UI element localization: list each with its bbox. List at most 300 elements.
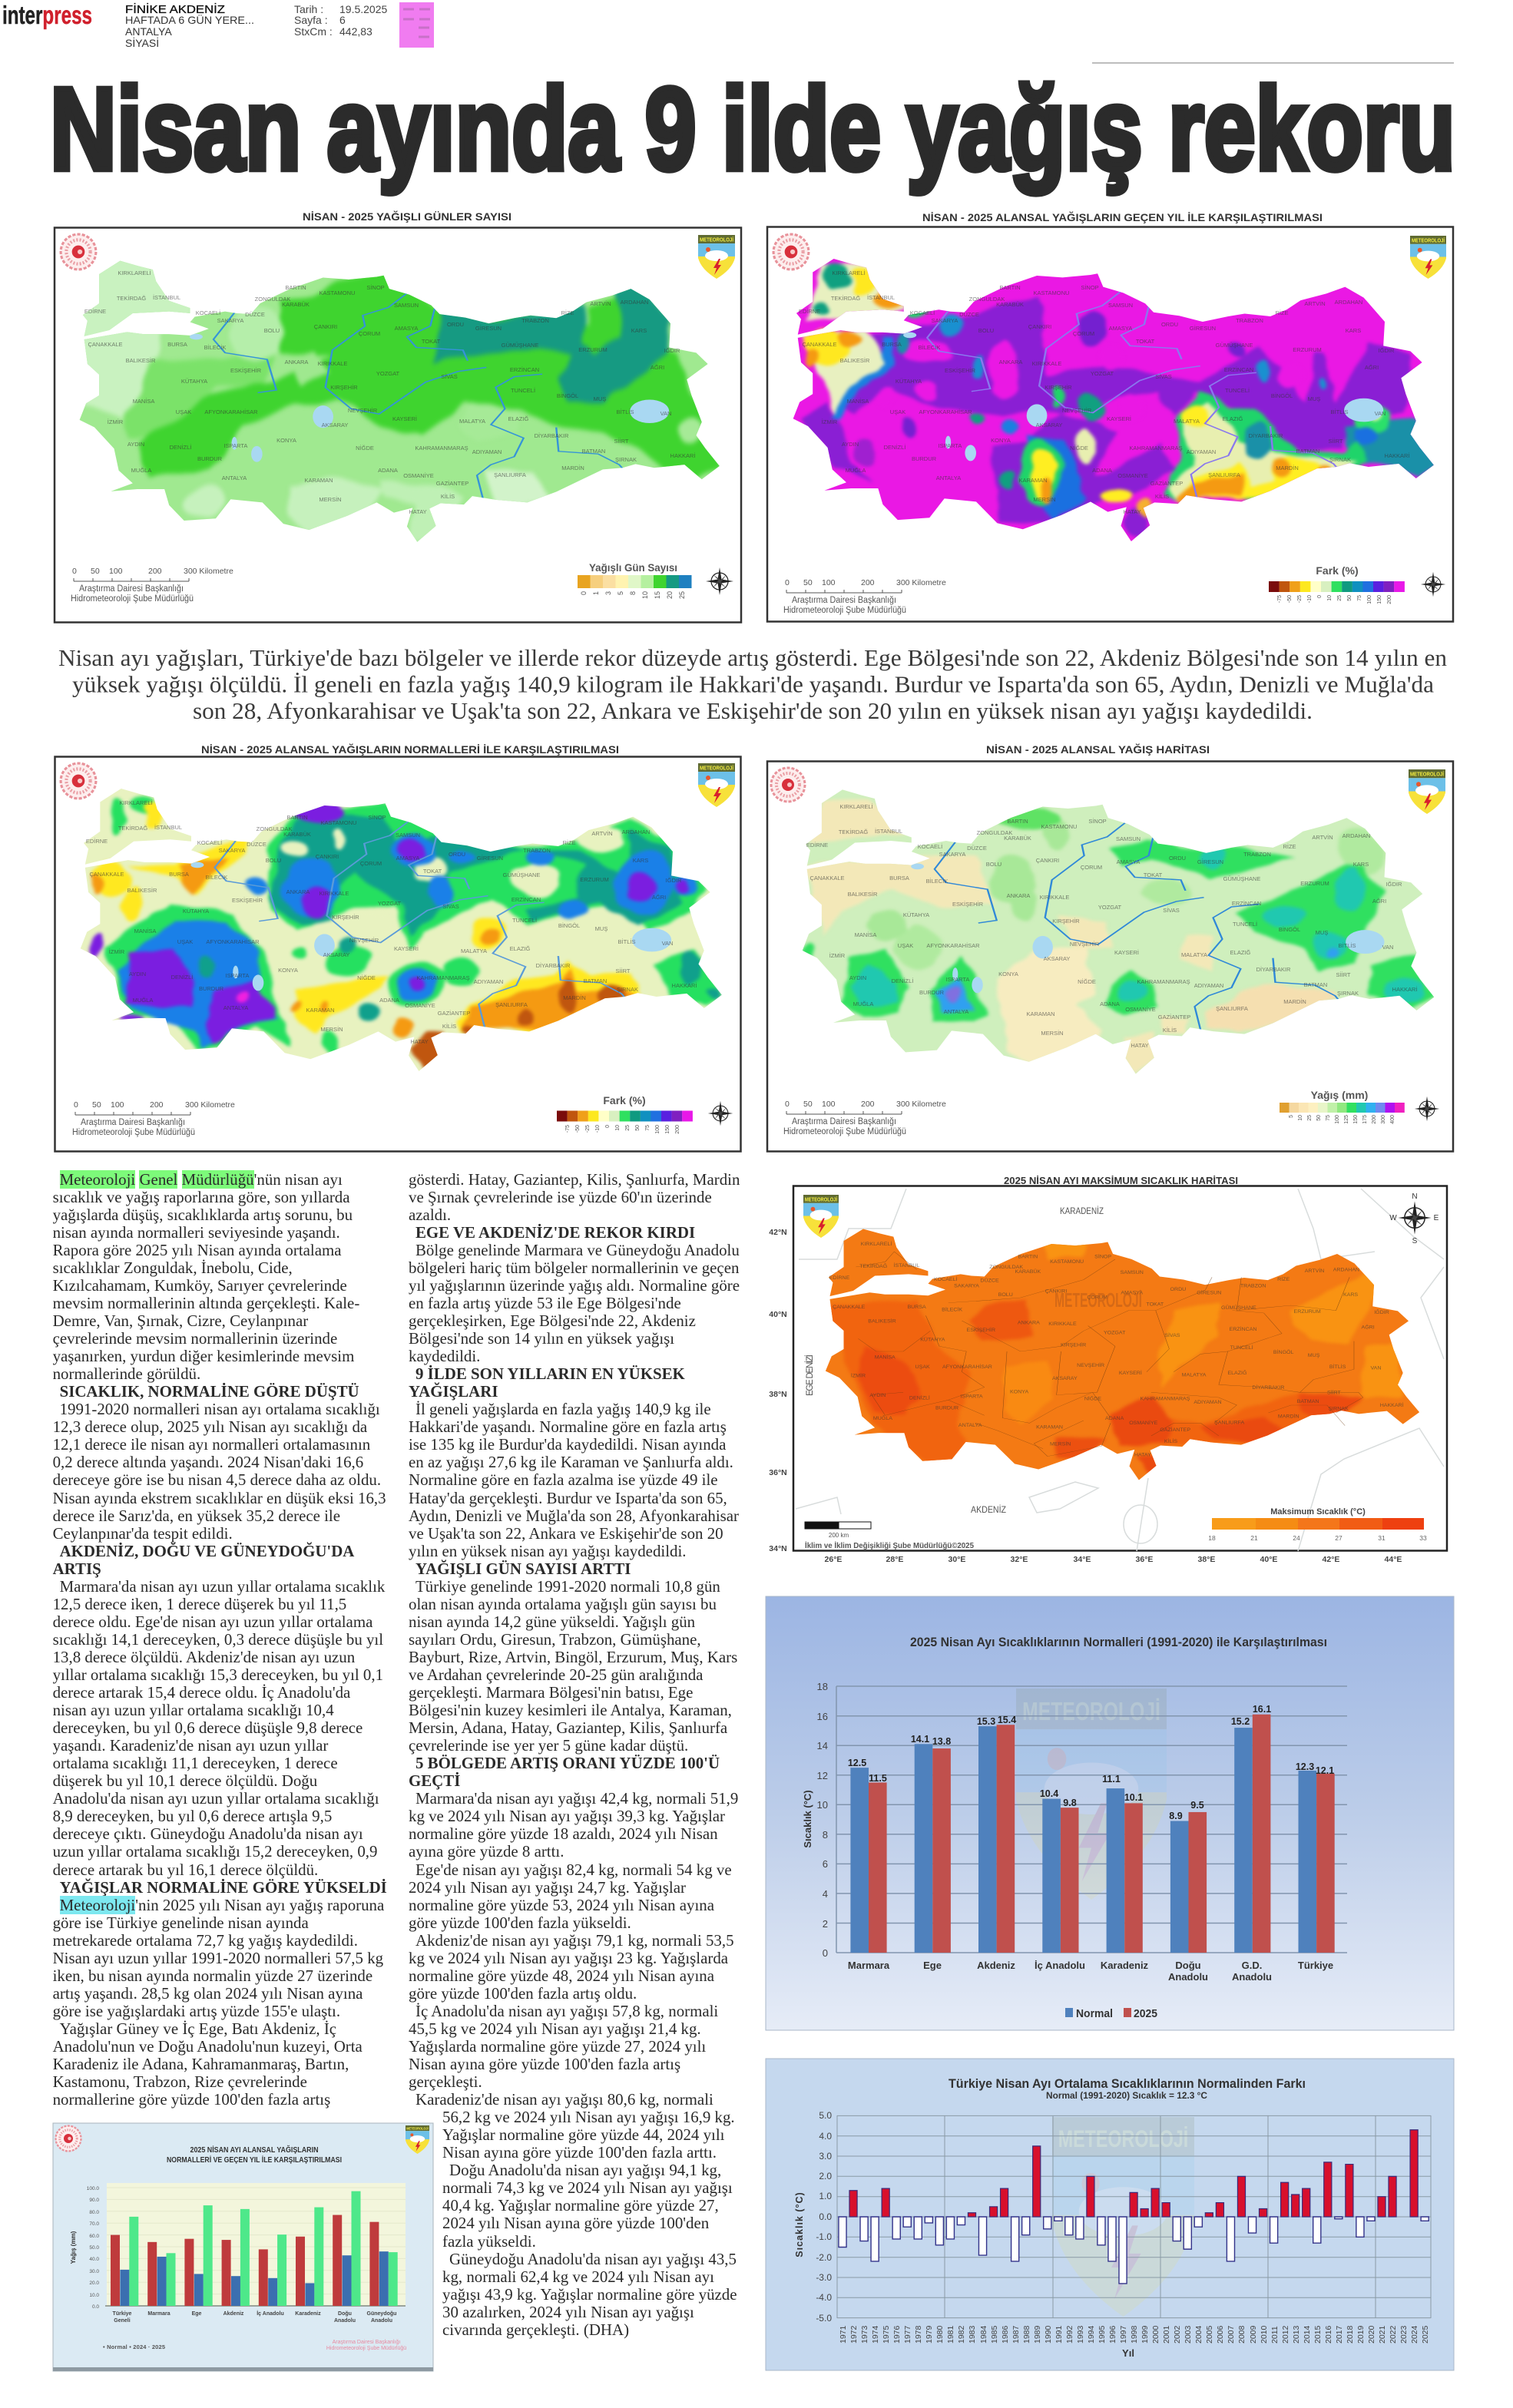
category labels: İç Anadolu <box>257 2310 284 2317</box>
source note <box>326 2340 406 2351</box>
map frame <box>55 227 741 622</box>
section: five regions: 45,5 kg ve 2024 yılı Nisan ayı yağışı 21,4 kg. <box>409 2019 701 2038</box>
year labels: 1977 <box>903 2325 912 2344</box>
year labels: 2014 <box>1303 2325 1312 2344</box>
map heading: NİSAN - 2025 ALANSAL YAĞIŞLARIN NORMALLERİ İLE KARŞILAŞTIRILMASI <box>201 743 619 756</box>
year labels: 1985 <box>990 2325 999 2344</box>
legend difference: 75 <box>645 1125 651 1131</box>
legend difference: 100 <box>655 1125 660 1134</box>
section: rainfall rose: göre ise yağışlardaki artış yüzde 155'e ulaştı. <box>53 2002 340 2020</box>
section: nine provinces: YAĞIŞLARI <box>409 1382 498 1401</box>
section: nine provinces: Aydın, Denizli ve Muğla'da son 28, Afyonkarahisar <box>409 1507 739 1525</box>
y axis labels: 0.0 <box>819 2211 832 2222</box>
temperature choropleth <box>825 1229 1419 1480</box>
section: five regions: göre yüzde 100'den fazla yükseldi. <box>409 1914 631 1932</box>
y axis title: Sıcaklık (°C) <box>794 2191 805 2258</box>
year labels: 1982 <box>957 2325 966 2344</box>
section: Aegean and Mediterranean records: EGE VE AKDENİZ'DE REKOR KIRDI <box>415 1223 695 1242</box>
y axis labels: 18 <box>817 1681 828 1692</box>
section: nine provinces: ve Uşak'ta son 22, Ankara ve Eskişehir'de son 20 <box>409 1524 723 1543</box>
section: regional increase: düşerek bu yıl 10,1 derece ölçüldü. Doğu <box>53 1771 317 1790</box>
map heading: NİSAN - 2025 YAĞIŞLI GÜNLER SAYISI <box>303 210 512 223</box>
section: Aegean and Mediterranean records: yıl yağışlarının üzerinde yağış aldı. Normaline göre <box>409 1276 740 1295</box>
scale bar: İklim ve İklim Değişikliği Şube Müdürlüğü©2025 <box>805 1540 974 1550</box>
legend precipitation: Yağış (mm) <box>1311 1089 1368 1101</box>
indented column end: Doğu Anadolu'da nisan ayı yağışı 94,1 kg, <box>449 2161 721 2179</box>
article lead: normallerinde görüldü. <box>53 1364 200 1383</box>
y axis labels: -2.0 <box>816 2252 832 2263</box>
sea labels <box>805 1206 1104 1515</box>
section: rainy days rose: gerçekleşti. Marmara Bölgesi'nin batısı, Ege <box>409 1683 693 1702</box>
section: rainfall rose: Yağışlar Güney ve İç Ege, Batı Akdeniz, İç <box>60 2019 336 2038</box>
value labels: 15.2 <box>1231 1716 1250 1727</box>
legend temperature: 31 <box>1378 1534 1386 1542</box>
longitude labels: 42°E <box>1323 1555 1339 1564</box>
legend difference: 200 <box>1387 595 1392 604</box>
chart heading: Türkiye Nisan Ayı Ortalama Sıcaklıklarının Normalinden Farkı <box>949 2076 1306 2091</box>
year labels: 1989 <box>1033 2325 1042 2344</box>
compass <box>706 567 733 595</box>
section: Aegean and Mediterranean records: bölgeleri hariç tüm bölgeler normallerinin ve geçen <box>409 1259 739 1277</box>
section: rainy days rose: Bayburt, Rize, Artvin, Bingöl, Erzurum, Muş, Kars <box>409 1648 737 1666</box>
value labels: 9.8 <box>1063 1798 1077 1808</box>
y axis title: Yağış (mm) <box>70 2231 77 2264</box>
article lead: çevrelerinde mevsim normallerinin üzerinde <box>53 1329 337 1348</box>
legend difference: Fark (%) <box>1316 564 1359 577</box>
indented column end: yağışı 43,9 kg. Yağışlar normaline göre yüzde <box>442 2285 737 2304</box>
section: five regions: GEÇTİ <box>409 1771 460 1790</box>
header: date and page info: Tarih : <box>294 3 323 15</box>
rivers and lakes <box>189 293 670 498</box>
section: rainfall rose <box>52 1878 387 2109</box>
column continuation <box>409 1170 740 1224</box>
legend difference <box>1269 564 1405 604</box>
y axis labels: 10 <box>817 1799 828 1811</box>
section: regional increase: ARTIŞ <box>53 1560 101 1578</box>
y axis labels: 0 <box>823 1947 828 1959</box>
section: five regions: kg ve 2024 yılı Nisan ayı yağışı 23 kg. Yağışlarda <box>409 1949 728 1967</box>
panel: temperature anomaly chart <box>766 2059 1454 2370</box>
shield logo <box>406 2125 429 2154</box>
grid lines <box>836 1686 1347 1953</box>
header: date and page info: 19.5.2025 <box>339 3 387 15</box>
legend precipitation: 150 <box>1353 1115 1359 1124</box>
value labels: 10.1 <box>1124 1792 1143 1803</box>
article lead: Meteoroloji Genel Müdürlüğü'nün nisan ayı <box>60 1170 343 1189</box>
rivers and lakes <box>911 823 1384 1030</box>
section: temperature fell: dereceye göre ise bu nisan 4,5 derece daha az oldu. <box>53 1470 381 1489</box>
section: rainy days rose: çevrelerinde ise yer yer 5 güne kadar düştü. <box>409 1736 688 1755</box>
year labels <box>839 2325 1430 2344</box>
year labels: 2009 <box>1249 2325 1258 2344</box>
watermark: METEOROLOJİ <box>1054 1288 1142 1312</box>
column continuation: gösterdi. Hatay, Gaziantep, Kilis, Şanlıurfa, Mardin <box>409 1170 740 1189</box>
bars positive anomaly <box>849 2130 1418 2217</box>
shield logo <box>698 235 735 279</box>
y axis labels: 50.0 <box>89 2245 99 2251</box>
legend temperature: 24 <box>1293 1534 1300 1542</box>
section: rainy days rose: nisan ayında 14,2 güne yükseldi. Yağışlı gün <box>409 1612 695 1631</box>
legend rainy days: 5 <box>617 591 624 595</box>
map frame <box>767 227 1453 622</box>
latitude labels: 38°N <box>769 1390 787 1399</box>
article lead: Rapora göre 2025 yılı Nisan ayında ortalama <box>53 1241 342 1259</box>
year labels: 1974 <box>871 2325 880 2344</box>
map heading: NİSAN - 2025 ALANSAL YAĞIŞ HARİTASI <box>986 743 1210 756</box>
section: Aegean and Mediterranean records <box>409 1223 740 1365</box>
section: Aegean and Mediterranean records: kaydedildi. <box>409 1347 480 1365</box>
section: nine provinces: İl geneli yağışlarda en fazla yağış 140,9 kg ile <box>415 1400 711 1418</box>
year labels: 1981 <box>946 2325 955 2344</box>
legend difference: 150 <box>1377 595 1382 604</box>
bars normal <box>850 1726 1316 1953</box>
legend difference: -75 <box>1277 595 1283 603</box>
grid lines <box>837 2115 1431 2318</box>
legend precipitation: 100 <box>1335 1115 1340 1124</box>
year labels: 1988 <box>1022 2325 1031 2344</box>
value labels: 11.1 <box>1102 1774 1121 1784</box>
indented column end: 56,2 kg ve 2024 yılı Nisan ayı yağışı 16,9 kg. <box>442 2108 735 2126</box>
section: five regions: normaline göre yüzde 18 azaldı, 2024 yılı Nisan <box>409 1824 718 1843</box>
year labels: 1986 <box>1001 2325 1010 2344</box>
chart background <box>53 2123 433 2371</box>
value labels: 14.1 <box>911 1734 929 1745</box>
category labels: Türkiye <box>113 2311 132 2317</box>
year labels: 2020 <box>1367 2325 1376 2344</box>
section: rainy days rose: olan nisan ayında ortalama yağışlı gün sayısı bu <box>409 1595 717 1613</box>
article column 1 <box>52 1170 387 2109</box>
value labels: 16.1 <box>1253 1704 1271 1715</box>
map frame <box>793 1186 1447 1551</box>
category labels: Anadolu <box>1232 1971 1272 1983</box>
year labels: 2003 <box>1184 2325 1193 2344</box>
year labels: 2005 <box>1205 2325 1214 2344</box>
longitude labels: 38°E <box>1198 1555 1215 1564</box>
legend precipitation: 200 <box>1372 1115 1377 1124</box>
year labels: 1990 <box>1044 2325 1053 2344</box>
legend difference: 10 <box>1327 595 1333 601</box>
section: regional increase: derece artarak 15,4 derece oldu. İç Anadolu'da <box>53 1683 350 1702</box>
y axis labels: 16 <box>817 1711 828 1722</box>
header: date and page info: 442,83 <box>339 25 372 38</box>
category labels: Marmara <box>848 1960 890 1971</box>
indented column end: civarında gerçekleşti. (DHA) <box>442 2320 629 2339</box>
year labels: 2024 <box>1410 2325 1419 2344</box>
legend temperature: 27 <box>1335 1534 1342 1542</box>
section: regional increase: ortalama sıcaklığı 11,1 dereceyken, 1 derece <box>53 1754 338 1772</box>
year labels: 1984 <box>979 2325 988 2344</box>
category labels: Marmara <box>147 2311 171 2317</box>
year labels: 1993 <box>1076 2325 1085 2344</box>
year labels: 1978 <box>914 2325 923 2344</box>
seal <box>773 234 809 270</box>
y axis labels: 8 <box>823 1829 828 1841</box>
section: rainfall rose: YAĞIŞLAR NORMALİNE GÖRE YÜKSELDİ <box>60 1878 387 1897</box>
category labels: Anadolu <box>1168 1971 1208 1983</box>
panel: map rainy days <box>54 210 741 622</box>
rivers and lakes <box>903 292 1384 498</box>
section: regional increase: derece oldu. Ege'de nisan ayı uzun yıllar ortalama <box>53 1612 372 1631</box>
value labels: 12.1 <box>1316 1765 1334 1776</box>
y axis labels: 100.0 <box>87 2186 99 2191</box>
category labels: Türkiye <box>1298 1960 1333 1971</box>
longitude labels: 32°E <box>1011 1555 1028 1564</box>
header: interpress logo: interpress <box>2 1 92 29</box>
category labels: Ege <box>923 1960 942 1971</box>
year labels: 2023 <box>1399 2325 1409 2344</box>
compass: W <box>1389 1214 1397 1222</box>
map heading: 2025 NİSAN AYI MAKSİMUM SICAKLIK HARİTASI <box>1004 1175 1238 1186</box>
year labels: 1973 <box>860 2325 869 2344</box>
section: regional increase: 8,9 dereceyken, bu yıl 0,6 derece artışla 9,5 <box>53 1807 332 1825</box>
shield logo <box>1409 769 1445 814</box>
chart heading <box>167 2145 342 2165</box>
year labels: 2012 <box>1281 2325 1290 2344</box>
header: publication info: FİNİKE AKDENİZ <box>125 2 225 16</box>
value labels: 10.4 <box>1040 1788 1058 1799</box>
y axis labels: 14 <box>817 1740 828 1751</box>
section: nine provinces: Hatay'da gerçekleşti. Burdur ve Isparta'da son 65, <box>409 1489 727 1507</box>
section: rainy days rose: sayıları Ordu, Giresun, Trabzon, Gümüşhane, <box>409 1630 701 1649</box>
y axis labels: 40.0 <box>89 2257 99 2262</box>
longitude labels: 34°E <box>1074 1555 1091 1564</box>
legend precipitation: 75 <box>1326 1115 1331 1121</box>
section: nine provinces: Normaline göre en fazla azalma ise yüzde 49 ile <box>409 1470 718 1489</box>
bars normal <box>111 2215 379 2306</box>
map labels <box>799 270 1409 515</box>
legend rainy days: 8 <box>629 591 637 595</box>
year labels: 2010 <box>1260 2325 1269 2344</box>
category labels: İç Anadolu <box>1035 1960 1085 1971</box>
category labels: Akdeniz <box>223 2311 244 2317</box>
legend precipitation: 5 <box>1289 1115 1294 1118</box>
year labels: 2013 <box>1292 2325 1301 2344</box>
section: rainfall rose: Meteoroloji'nin 2025 yılı Nisan ayı yağış raporuna <box>60 1896 384 1914</box>
legend difference <box>557 1094 693 1134</box>
sea labels: KARADENİZ <box>1060 1206 1104 1216</box>
legend difference: -25 <box>1297 595 1303 603</box>
section: nine provinces: Hakkari'de yaşandı. Normaline göre en fazla artış <box>409 1417 727 1436</box>
header: publication info: SİYASİ <box>125 36 159 49</box>
year labels: 1975 <box>882 2325 891 2344</box>
section: temperature fell <box>53 1382 386 1543</box>
intro paragraph: son 28, Afyonkarahisar ve Uşak'ta son 22, Ankara ve Eskişehir'de son 20 yılın en yüksek nisan ayı yağışı kaydedildi. <box>193 698 1313 724</box>
scale bar <box>783 578 946 615</box>
value labels: 12.3 <box>1296 1761 1314 1772</box>
chart heading: NORMALLERİ VE GEÇEN YIL İLE KARŞILAŞTIRILMASI <box>167 2155 342 2165</box>
panel: map compared with normals <box>55 743 740 1152</box>
section: rainy days rose: ve Ardahan çevrelerinde 20-25 gün aralığında <box>409 1665 703 1684</box>
header rule <box>1092 62 1454 64</box>
year labels: 2000 <box>1151 2325 1160 2344</box>
section: five regions: ayına göre yüzde 8 arttı. <box>409 1842 564 1861</box>
bars negative anomaly <box>839 2217 1429 2284</box>
section: rainy days rose: Bölgesi'nin kuzey kesimleri ile Antalya, Karaman, <box>409 1701 732 1719</box>
chart background <box>766 2059 1454 2370</box>
legend precipitation: 125 <box>1344 1115 1349 1124</box>
y axis labels: 60.0 <box>89 2234 99 2239</box>
neighbouring borders <box>796 1189 1444 1551</box>
y axis labels: 4 <box>823 1888 828 1900</box>
panel: temperature bar chart <box>766 1596 1454 2030</box>
header: pink page thumbnail <box>399 2 434 48</box>
indented column end: normali 74,3 kg ve 2024 yılı Nisan ayı yağışı <box>442 2178 733 2197</box>
chart heading: 2025 Nisan Ayı Sıcaklıklarının Normalleri (1991-2020) ile Karşılaştırılması <box>910 1635 1327 1649</box>
compass <box>1389 1192 1439 1245</box>
value labels: 9.5 <box>1190 1800 1204 1811</box>
year labels: 1996 <box>1108 2325 1117 2344</box>
section: nine provinces: ise 135 kg ile Burdur'da kaydedildi. Nisan ayında <box>409 1435 726 1454</box>
legend precipitation: 10 <box>1298 1115 1303 1121</box>
article lead: sıcaklıklar Zonguldak, İnebolu, Cide, <box>53 1259 293 1277</box>
scale bar: 200 km <box>829 1532 849 1539</box>
article lead: yağışlarda düşüş, sıcaklıklarda artış sorunu, bu <box>53 1206 353 1224</box>
chart heading: 2025 NİSAN AYI ALANSAL YAĞIŞLARIN <box>190 2145 318 2155</box>
legend rainy days <box>578 561 691 599</box>
header: publication info: ANTALYA <box>125 25 172 38</box>
category labels: Anadolu <box>334 2318 356 2324</box>
choropleth difference previous year <box>793 259 1434 541</box>
indented column end: fazla yükseldi. <box>442 2231 536 2250</box>
legend precipitation: 175 <box>1362 1115 1368 1124</box>
legend temperature <box>1208 1507 1427 1542</box>
legend rainy days: 10 <box>641 591 649 599</box>
year labels: 1999 <box>1141 2325 1150 2344</box>
section: five regions: normaline göre yüzde 53, 2024 yılı Nisan ayına <box>409 1896 714 1914</box>
choropleth difference normals <box>80 789 722 1071</box>
seal <box>61 763 96 799</box>
year labels: 2004 <box>1194 2325 1203 2344</box>
province borders <box>856 1252 1363 1457</box>
value labels: 15.4 <box>998 1715 1016 1725</box>
value labels: 11.5 <box>869 1773 887 1784</box>
year labels: 1987 <box>1011 2325 1021 2344</box>
y axis labels: -5.0 <box>816 2313 832 2324</box>
section: regional increase: Anadolu'da nisan ayı uzun yıllar ortalama sıcaklığı <box>53 1789 379 1808</box>
section: five regions: normaline göre yüzde 48, 2024 yılı Nisan ayına <box>409 1966 714 1985</box>
section: temperature fell: SICAKLIK, NORMALİNE GÖRE DÜŞTÜ <box>60 1382 359 1401</box>
scale bar <box>71 567 233 604</box>
legend: Normal <box>1076 2007 1113 2020</box>
longitude labels: 40°E <box>1260 1555 1277 1564</box>
section: nine provinces: 9 İLDE SON YILLARIN EN YÜKSEK <box>415 1364 685 1383</box>
section: five regions: Marmara'da nisan ayı yağışı 42,4 kg, normali 51,9 <box>415 1789 738 1808</box>
shield logo <box>1410 236 1446 279</box>
year labels: 2018 <box>1346 2325 1355 2344</box>
indented column end: Nisan ayına göre yüzde 100'den fazla arttı. <box>442 2143 717 2162</box>
legend: • Normal • 2024 · 2025 <box>103 2344 165 2350</box>
year labels: 2019 <box>1356 2325 1366 2344</box>
year labels: 1972 <box>849 2325 859 2344</box>
section: five regions: 2024 yılı Nisan ayı yağışı 24,7 kg. Yağışlar <box>409 1878 686 1897</box>
section: rainfall rose: iken, bu nisan ayında normalin yüzde 27 üzerinde <box>53 1966 372 1985</box>
indented column end: 40,4 kg. Yağışlar normaline göre yüzde 27, <box>442 2196 719 2214</box>
legend precipitation: 400 <box>1390 1115 1395 1124</box>
legend rainy days: 15 <box>654 591 661 599</box>
compass <box>708 1101 733 1126</box>
section: regional increase: 12,5 derece iken, 1 derece düşerek bu yıl 11,5 <box>53 1595 346 1613</box>
y axis labels: 20.0 <box>89 2281 99 2286</box>
sea labels: AKDENİZ <box>971 1505 1006 1515</box>
year labels: 1971 <box>839 2325 848 2344</box>
article lead: Kızılcahamam, Kumköy, Sarıyer çevrelerinde <box>53 1276 347 1295</box>
value labels: 12.5 <box>848 1758 866 1768</box>
y axis labels: 12 <box>817 1770 828 1781</box>
year labels: 2015 <box>1313 2325 1323 2344</box>
legend temperature: 21 <box>1250 1534 1258 1542</box>
section: rainy days rose: YAĞIŞLI GÜN SAYISI ARTTI <box>415 1560 631 1578</box>
year labels: 2022 <box>1389 2325 1398 2344</box>
rivers and lakes <box>190 822 671 1027</box>
seal <box>55 2125 81 2152</box>
category labels: Geneli <box>114 2318 131 2324</box>
shield logo <box>803 1195 839 1238</box>
section: regional increase: dereceyken, bu yıl 0,6 derece düşüşle 9,8 derece <box>53 1718 363 1737</box>
legend difference: 0 <box>605 1125 611 1128</box>
value labels: 8.9 <box>1169 1811 1183 1821</box>
seal <box>771 768 805 802</box>
compass: N <box>1412 1192 1418 1201</box>
y axis labels: 2 <box>823 1918 828 1930</box>
year labels: 2011 <box>1270 2326 1280 2344</box>
section: rainy days rose <box>409 1560 737 1755</box>
legend difference: 25 <box>625 1125 631 1131</box>
category labels: Akdeniz <box>977 1960 1015 1971</box>
section: rainfall rose: Karadeniz ile Adana, Kahramanmaraş, Bartın, <box>53 2055 349 2073</box>
legend difference: -10 <box>1307 595 1313 603</box>
indented column end: Güneydoğu Anadolu'da nisan ayı yağışı 43,5 <box>449 2250 737 2268</box>
section: five regions: Nisan ayına göre yüzde 100'den fazla artış <box>409 2055 680 2073</box>
section: rainfall rose: Kastamonu, Trabzon, Rize çevrelerinde <box>53 2072 307 2091</box>
longitude labels: 28°E <box>886 1555 903 1564</box>
section: regional increase: nisan ayı uzun yıllar ortalama sıcaklığı 10,4 <box>53 1701 334 1719</box>
latitude labels: 42°N <box>769 1228 787 1237</box>
section: nine provinces <box>409 1364 739 1560</box>
section: regional increase: dereceye çıktı. Güneydoğu Anadolu'da nisan ayı <box>53 1824 363 1843</box>
legend rainy days: 3 <box>604 591 612 595</box>
year labels: 1980 <box>935 2325 945 2344</box>
header: publication info: HAFTADA 6 GÜN YERE... <box>125 13 254 26</box>
panel: precipitation map <box>767 743 1453 1152</box>
section: rainfall rose: Nisan ayı uzun yıllar 1991-2020 normalleri 57,5 kg <box>53 1949 383 1967</box>
y axis labels: 90.0 <box>89 2198 99 2203</box>
year labels: 2025 <box>1421 2325 1430 2344</box>
shield logo <box>698 763 735 807</box>
column continuation: ve Şırnak çevrelerinde ise yüzde 60'ın üzerinde <box>409 1188 712 1206</box>
y axis labels: 0.0 <box>92 2304 99 2310</box>
watermark <box>1016 1689 1167 1900</box>
legend temperature: 33 <box>1419 1534 1427 1542</box>
category labels: G.D. <box>1242 1960 1262 1971</box>
year labels: 2007 <box>1227 2325 1236 2344</box>
section: rainfall rose: Anadolu'nun ve Doğu Anadolu'nun kuzeyi, Orta <box>53 2037 363 2056</box>
watermark <box>1052 2117 1194 2317</box>
legend difference: Fark (%) <box>603 1094 646 1106</box>
year labels: 2006 <box>1216 2325 1225 2344</box>
article lead: Demre, Van, Şırnak, Cizre, Ceylanpınar <box>53 1312 308 1330</box>
y axis labels: 1.0 <box>819 2191 832 2201</box>
chart background <box>766 1596 1454 2030</box>
compass: E <box>1434 1214 1439 1222</box>
section: temperature fell: Ceylanpınar'da tespit edildi. <box>53 1524 233 1543</box>
legend difference: 10 <box>615 1125 621 1131</box>
legend difference: 150 <box>665 1125 670 1134</box>
y axis labels: 80.0 <box>89 2210 99 2215</box>
indented column end: 2024 yılı Nisan ayına göre yüzde 100'den <box>442 2214 709 2232</box>
compass <box>1421 572 1445 597</box>
header: date and page info: StxCm : <box>294 25 333 38</box>
article lead: sıcaklık ve yağış raporlarına göre, son yıllarda <box>53 1188 350 1206</box>
